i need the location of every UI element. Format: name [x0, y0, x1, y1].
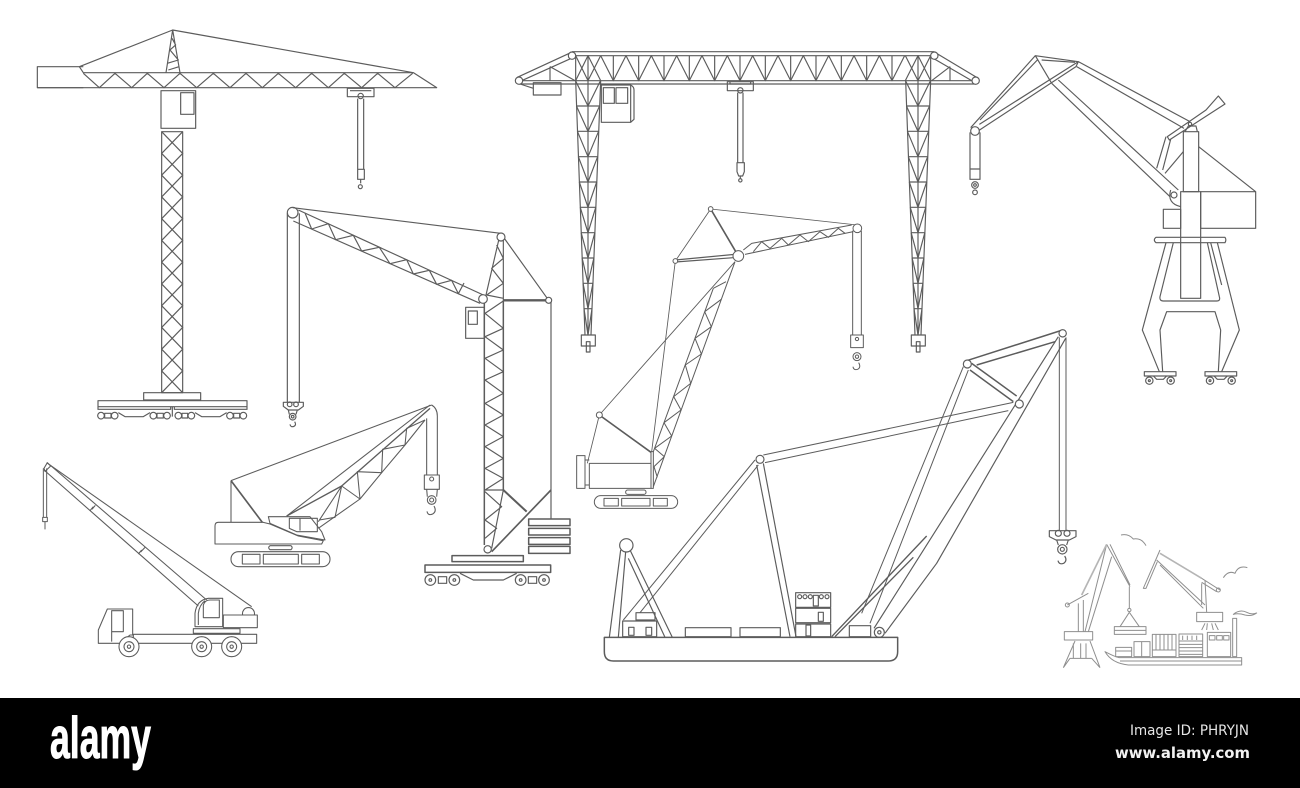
- right cantilever: [931, 52, 979, 84]
- boom: [287, 405, 430, 528]
- turntable: [626, 490, 646, 494]
- machine house: [1163, 147, 1256, 228]
- operator cab: [466, 307, 484, 338]
- left bogie: [1144, 372, 1176, 384]
- tower upper section: [486, 240, 503, 300]
- body: [215, 522, 323, 544]
- pivot: [1170, 190, 1181, 207]
- left cantilever: [515, 52, 576, 84]
- mobile truck crane: [43, 463, 257, 657]
- cable: [47, 463, 252, 607]
- wheels: [119, 637, 242, 657]
- tower lattice: [484, 300, 503, 545]
- stacked containers: [796, 593, 831, 637]
- cargo ship: [1105, 618, 1242, 665]
- hook: [851, 231, 863, 370]
- crawler lattice crane: [215, 405, 439, 567]
- right bogie: [1205, 372, 1237, 384]
- jib truss: [37, 67, 437, 88]
- gantry crane: [515, 52, 979, 352]
- upper tie: [763, 402, 1013, 463]
- boom truss: [293, 210, 483, 303]
- hook: [43, 468, 47, 529]
- turntable: [269, 546, 292, 550]
- seagulls: [1121, 535, 1247, 578]
- boom head frame: [963, 330, 1066, 402]
- tower crane on rails: [37, 30, 437, 419]
- main boom: [874, 337, 1066, 637]
- crawler track: [594, 496, 678, 508]
- counterweights: [529, 519, 570, 553]
- back stays: [862, 367, 968, 623]
- counterweight box: [520, 83, 561, 95]
- alamy logo: alamy: [50, 706, 151, 771]
- counterweight: [37, 67, 83, 88]
- lower boom lattice: [653, 262, 735, 487]
- stay and mast: [231, 405, 432, 522]
- left harbour crane: [1063, 544, 1130, 668]
- rail base and bogies: [98, 393, 247, 419]
- left leg: [575, 81, 601, 352]
- telescopic boom: [44, 463, 207, 606]
- joints: [596, 207, 862, 418]
- upper arm frame: [971, 56, 1078, 135]
- body and counterweight: [577, 452, 653, 488]
- luffing tower crane on rails: [283, 207, 570, 585]
- trolley and hook: [727, 82, 753, 182]
- website: www.alamy.com: [1115, 744, 1250, 762]
- boom brace: [832, 536, 927, 637]
- cab: [268, 517, 325, 540]
- trolley and hook: [347, 88, 374, 189]
- lower frame: [479, 295, 551, 553]
- rail base: [425, 556, 551, 585]
- floating crane barge: [604, 330, 1076, 661]
- superstructure cab: [195, 598, 223, 627]
- deck house: [623, 613, 657, 637]
- rear balance arm: [1157, 96, 1225, 173]
- crawler track: [231, 552, 330, 567]
- bow a-frame: [609, 539, 672, 637]
- apex and stays: [79, 30, 413, 73]
- lattice tower: [162, 132, 183, 393]
- funnel smoke: [1233, 611, 1257, 616]
- operator cab: [161, 91, 196, 128]
- chassis: [133, 629, 257, 643]
- stays: [293, 208, 552, 519]
- rear housing: [223, 608, 257, 628]
- suspended load: [1114, 587, 1146, 634]
- central column: [1181, 192, 1201, 298]
- operator cab: [601, 85, 634, 122]
- upper jib: [743, 225, 853, 254]
- hook line: [1049, 337, 1076, 564]
- tie rod: [1077, 62, 1190, 128]
- deck cargo: [685, 626, 871, 637]
- upper mast: [1183, 126, 1199, 192]
- hook: [970, 132, 980, 195]
- hook line: [424, 405, 439, 515]
- right leg: [905, 81, 931, 352]
- truck cab: [98, 609, 133, 643]
- portal harbour crane: [970, 56, 1256, 384]
- hull: [604, 637, 898, 661]
- hook block: [283, 402, 303, 427]
- portal legs: [1142, 243, 1239, 372]
- top girder truss: [519, 52, 976, 84]
- middle strut: [756, 455, 796, 637]
- small port scene: [1063, 535, 1257, 668]
- footer bar: [0, 698, 1300, 788]
- right harbour crane: [1143, 550, 1223, 630]
- main boom: [1052, 80, 1178, 197]
- image id: Image ID: PHRYJN: [1130, 723, 1249, 739]
- forward stay: [623, 460, 758, 620]
- crawler luffing crane: [577, 207, 863, 508]
- hoist pulley and rope: [287, 207, 299, 402]
- deck: [1154, 237, 1226, 243]
- stays: [587, 209, 857, 463]
